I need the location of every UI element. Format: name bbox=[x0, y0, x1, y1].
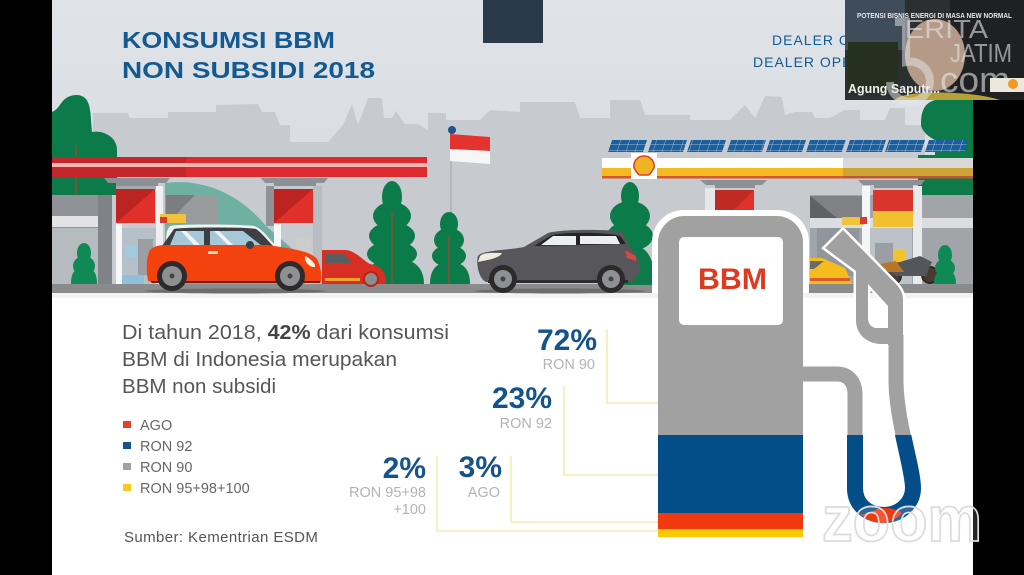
stat: 23% RON 92 bbox=[492, 382, 552, 432]
stat: 23% RON 92: 23% bbox=[492, 382, 552, 415]
dealer text: DEALER O bbox=[772, 32, 851, 48]
hose red bbox=[860, 508, 902, 523]
source: Sumber: Kementrian ESDM bbox=[124, 529, 318, 546]
stat: 3% AGO: 3% bbox=[459, 451, 502, 484]
canopy: red station bbox=[52, 157, 427, 177]
pillars and building: Shell station bbox=[700, 180, 973, 293]
zoom watermark: zoom bbox=[822, 483, 982, 555]
title: NON SUBSIDI 2018 bbox=[122, 57, 375, 83]
pump body gray bbox=[658, 216, 803, 435]
intro text: Di tahun 2018, 42% dari konsumsi bbox=[122, 322, 449, 344]
tree: top right bbox=[918, 100, 973, 195]
stat: 72% RON 90 bbox=[537, 324, 597, 373]
pump outline bbox=[652, 210, 809, 293]
logo: Shell bbox=[631, 153, 657, 179]
pump AGO band bbox=[658, 513, 803, 529]
legend RON 90: RON 90 bbox=[140, 460, 192, 476]
pump RON 92 band bbox=[658, 435, 803, 513]
hose gray bbox=[803, 335, 911, 435]
intro text: BBM non subsidi bbox=[122, 376, 276, 398]
leader lines bbox=[437, 329, 658, 531]
flag: Indonesia bbox=[448, 126, 490, 217]
stat: 2% RON 95+98+100: +100 bbox=[393, 502, 426, 518]
car: small red bbox=[322, 250, 386, 286]
fuel pump bbox=[652, 210, 913, 537]
legend AGO: AGO bbox=[140, 418, 172, 434]
nozzle bbox=[825, 230, 903, 345]
intro text bbox=[122, 322, 449, 398]
stat: 2% RON 95+98+100: 2% bbox=[383, 452, 426, 485]
site watermark logo bbox=[890, 22, 930, 102]
tree: top left bbox=[52, 95, 117, 195]
top dark tab bbox=[483, 0, 543, 43]
site watermark: JATIM bbox=[950, 38, 1012, 68]
car: dark SUV bbox=[475, 230, 645, 294]
tree: center large bbox=[366, 181, 424, 284]
legend RON 95+98+100: RON 95+98+100 bbox=[140, 481, 250, 497]
stat: 2% RON 95+98+100 bbox=[349, 452, 426, 518]
site watermark: ERITA bbox=[905, 14, 989, 44]
pump RON 95+98+100 band bbox=[658, 529, 803, 537]
city skyline bbox=[93, 96, 925, 285]
speaker name: Agung Saputr... bbox=[848, 81, 940, 96]
legend bbox=[123, 418, 250, 497]
pillars: red station bbox=[104, 178, 328, 284]
intro text: BBM di Indonesia merupakan bbox=[122, 349, 397, 371]
dealer text bbox=[753, 32, 852, 70]
station building: left bbox=[52, 182, 305, 285]
stat: 72% RON 90: RON 90 bbox=[543, 357, 595, 373]
tree: behind pump bbox=[605, 182, 655, 285]
dealer text: DEALER OPE bbox=[753, 54, 852, 70]
video caption: POTENSI BISNIS ENERGI DI MASA NEW NORMAL bbox=[857, 13, 1013, 20]
car: yellow bbox=[810, 258, 852, 284]
stat: 3% AGO bbox=[459, 451, 502, 501]
stat: 2% RON 95+98+100: RON 95+98 bbox=[349, 485, 426, 501]
title bbox=[122, 27, 375, 83]
tree: small left bbox=[71, 243, 97, 284]
pump screen bbox=[679, 237, 783, 325]
hose blue bbox=[847, 435, 921, 523]
site watermark: com bbox=[940, 59, 1010, 100]
tree: center small bbox=[430, 212, 470, 284]
title: KONSUMSI BBM bbox=[122, 27, 335, 53]
car: red hatchback bbox=[145, 224, 325, 294]
road bbox=[52, 284, 973, 298]
motorcycle bbox=[880, 256, 938, 284]
solar panels bbox=[608, 140, 968, 152]
canopy: Shell station bbox=[602, 158, 973, 178]
stat: 23% RON 92: RON 92 bbox=[500, 416, 552, 432]
site watermark bbox=[905, 14, 1012, 100]
stat: 72% RON 90: 72% bbox=[537, 324, 597, 357]
pump label: BBM bbox=[698, 263, 767, 296]
tree: small right bbox=[934, 245, 956, 284]
stat: 3% AGO: AGO bbox=[468, 485, 500, 501]
legend RON 92: RON 92 bbox=[140, 439, 192, 455]
video thumbnail bbox=[845, 0, 1024, 102]
